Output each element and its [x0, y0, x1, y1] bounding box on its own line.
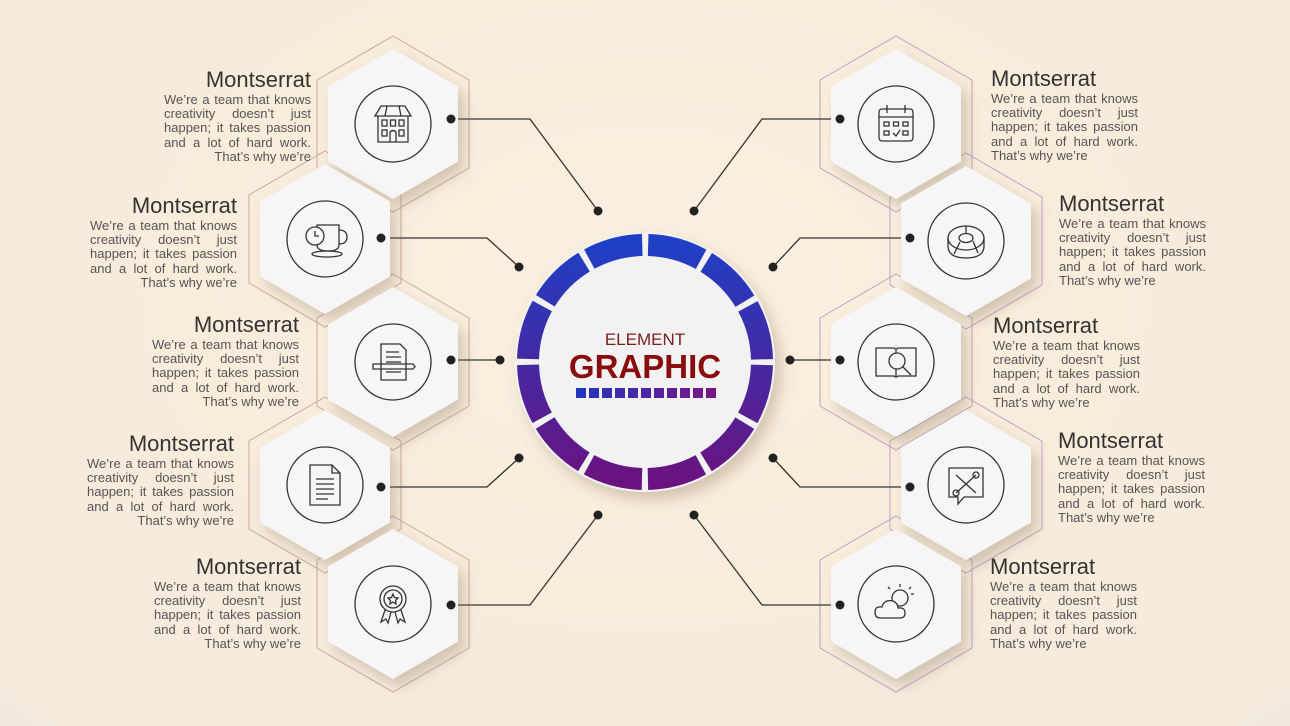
text R3: We’re a team that knows: [993, 338, 1140, 353]
text R5: happen; it takes passion: [990, 607, 1137, 622]
text R3: Montserrat: [993, 313, 1098, 338]
text R2: [1059, 191, 1206, 288]
text L1: happen; it takes passion: [164, 120, 311, 135]
text L1: creativity doesn’t just: [164, 106, 311, 121]
hex: right 4 tools: [901, 410, 1031, 560]
text R4: [1058, 428, 1205, 525]
text L5: That’s why we’re: [204, 636, 301, 651]
center badge: [515, 232, 775, 492]
text L3: happen; it takes passion: [152, 365, 299, 380]
text R2: We’re a team that knows: [1059, 216, 1206, 231]
text R1: creativity doesn’t just: [991, 105, 1138, 120]
text R5: That’s why we’re: [990, 636, 1087, 651]
text R1: and a lot of hard work.: [991, 134, 1138, 149]
text R5: [990, 554, 1137, 651]
text L4: happen; it takes passion: [87, 484, 234, 499]
text R4: Montserrat: [1058, 428, 1163, 453]
text R1: [991, 66, 1138, 163]
text R4: happen; it takes passion: [1058, 481, 1205, 496]
text L1: and a lot of hard work.: [164, 135, 311, 150]
text R3: and a lot of hard work.: [993, 381, 1140, 396]
text L5: [154, 554, 301, 651]
text R4: We’re a team that knows: [1058, 453, 1205, 468]
text R4: creativity doesn’t just: [1058, 467, 1205, 482]
center title: GRAPHIC: [569, 348, 721, 385]
text L3: That’s why we’re: [202, 394, 299, 409]
center title: ELEMENT: [605, 330, 685, 349]
text L2: creativity doesn’t just: [90, 232, 237, 247]
text L3: We’re a team that knows: [152, 337, 299, 352]
text L4: That’s why we’re: [137, 513, 234, 528]
text R2: Montserrat: [1059, 191, 1164, 216]
text L5: happen; it takes passion: [154, 607, 301, 622]
text R1: happen; it takes passion: [991, 119, 1138, 134]
text L1: Montserrat: [206, 67, 311, 92]
text L4: [87, 431, 234, 528]
text R5: creativity doesn’t just: [990, 593, 1137, 608]
text R1: Montserrat: [991, 66, 1096, 91]
text R5: and a lot of hard work.: [990, 622, 1137, 637]
hex: right 2 donut: [901, 166, 1031, 316]
connector lines: [381, 119, 910, 605]
text L5: We’re a team that knows: [154, 579, 301, 594]
text R3: creativity doesn’t just: [993, 352, 1140, 367]
text R4: and a lot of hard work.: [1058, 496, 1205, 511]
text R2: happen; it takes passion: [1059, 244, 1206, 259]
text R2: creativity doesn’t just: [1059, 230, 1206, 245]
text R1: We’re a team that knows: [991, 91, 1138, 106]
text R5: We’re a team that knows: [990, 579, 1137, 594]
text L1: [164, 67, 311, 164]
hex: right 3 book search: [831, 287, 961, 437]
text L2: We’re a team that knows: [90, 218, 237, 233]
hex: right 5 weather: [831, 529, 961, 679]
text L2: Montserrat: [132, 193, 237, 218]
text L5: Montserrat: [196, 554, 301, 579]
text R2: and a lot of hard work.: [1059, 259, 1206, 274]
text L5: and a lot of hard work.: [154, 622, 301, 637]
squares: [576, 388, 716, 398]
text L3: Montserrat: [194, 312, 299, 337]
text L2: That’s why we’re: [140, 275, 237, 290]
text L4: and a lot of hard work.: [87, 499, 234, 514]
text R3: [993, 313, 1140, 410]
hex: right 1 calendar: [831, 49, 961, 199]
text R4: That’s why we’re: [1058, 510, 1155, 525]
text R2: That’s why we’re: [1059, 273, 1156, 288]
dots: [376, 114, 914, 610]
text L3: and a lot of hard work.: [152, 380, 299, 395]
hex: left 1 building: [328, 49, 458, 199]
hex: left 2 coffee clock: [260, 164, 390, 314]
hex: left 4 document: [260, 410, 390, 560]
text L4: Montserrat: [129, 431, 234, 456]
text L3: creativity doesn’t just: [152, 351, 299, 366]
text R3: happen; it takes passion: [993, 366, 1140, 381]
text L1: We’re a team that knows: [164, 92, 311, 107]
text L2: [90, 193, 237, 290]
text L5: creativity doesn’t just: [154, 593, 301, 608]
center title: [569, 330, 721, 385]
outline hexagons: [249, 36, 469, 692]
text L3: [152, 312, 299, 409]
hex: left 3 document pen: [328, 287, 458, 437]
text R1: That’s why we’re: [991, 148, 1088, 163]
text L4: We’re a team that knows: [87, 456, 234, 471]
text L2: and a lot of hard work.: [90, 261, 237, 276]
text L1: That’s why we’re: [214, 149, 311, 164]
text L4: creativity doesn’t just: [87, 470, 234, 485]
text L2: happen; it takes passion: [90, 246, 237, 261]
hex: left 5 badge: [328, 529, 458, 679]
text R3: That’s why we’re: [993, 395, 1090, 410]
text R5: Montserrat: [990, 554, 1095, 579]
